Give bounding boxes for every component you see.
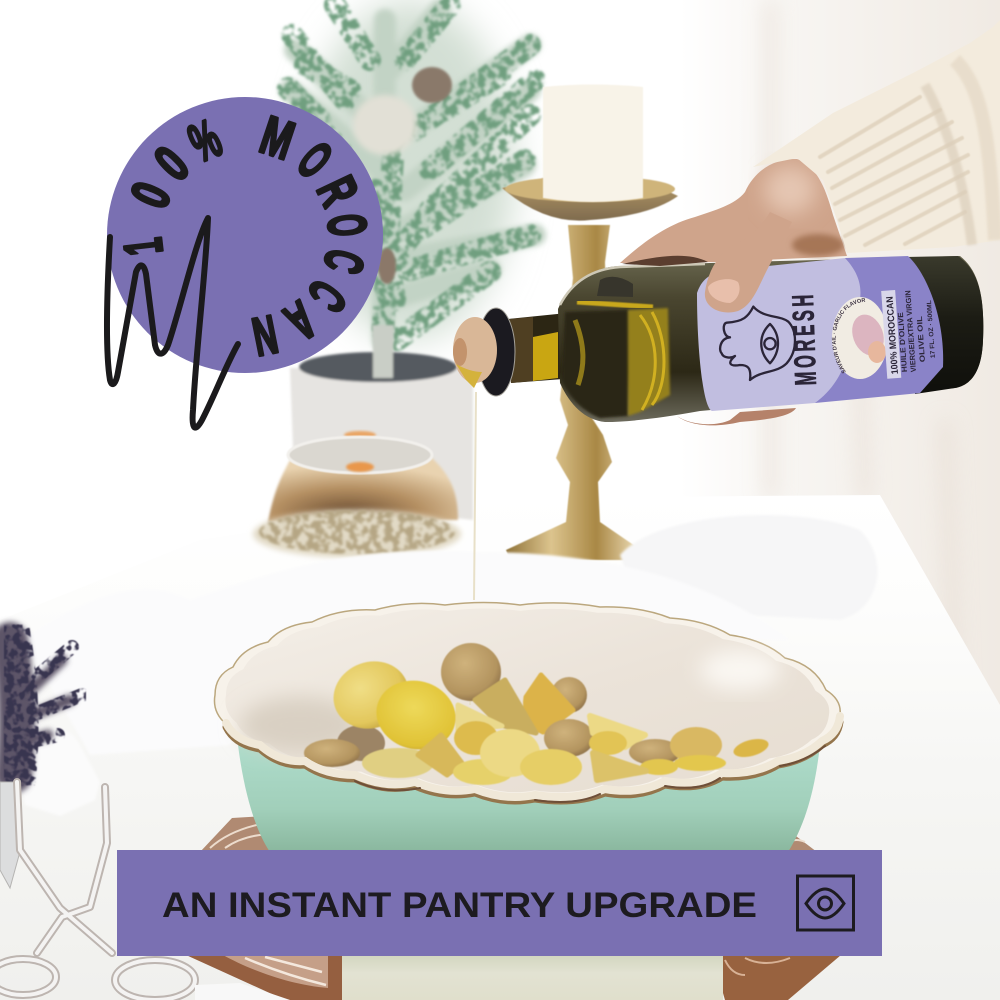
bowl: front scalloped rim: [226, 716, 840, 802]
badge: circular text: 0: [118, 174, 182, 216]
olive oil bottle: [453, 256, 984, 422]
bottle: golden oil in neck: [533, 332, 558, 381]
bowl: ivory interior with scalloped rim: [214, 602, 840, 798]
bowl: mint outer body: [238, 745, 820, 852]
photo: white pillar candle: [543, 84, 643, 202]
bottle: air bubble: [597, 277, 633, 297]
banner: [117, 850, 882, 956]
photo: lavender sprig: [8, 632, 82, 778]
label: product description: HUILE D'OLIVE: [896, 312, 909, 372]
bottle: black collar: [477, 308, 515, 396]
badge: circular text: O: [315, 212, 377, 239]
olive oil stream: [470, 392, 476, 705]
badge: circular text: 1: [114, 235, 175, 258]
icon: hamsa with eye: [720, 307, 795, 380]
brand name: MORESH: [787, 294, 823, 386]
bottle: dark oil centre: [562, 310, 628, 418]
photo: glass vase: [0, 782, 21, 888]
photo: carved wooden trivet and marble board: [186, 815, 841, 1000]
potatoes in bowl: [304, 643, 770, 785]
bottle: base dark glass: [905, 256, 983, 394]
label: product description: [896, 290, 937, 372]
badge: circular text: [114, 104, 377, 366]
icon: eye in square frame: [798, 876, 854, 930]
badge: circular text: R: [305, 168, 369, 215]
badge: purple circle: [107, 97, 383, 373]
bottle: tan pour spout: [453, 317, 497, 388]
cream knit sweater sleeve: [753, 20, 1000, 253]
label: product description: OLIVE OIL: [915, 315, 927, 362]
photo: white table: [0, 495, 1000, 1000]
bottle: neck: [508, 313, 567, 383]
badge: circular text: %: [181, 108, 230, 174]
badge: circular text: M: [253, 104, 302, 171]
photo: winter tree: [288, 0, 535, 378]
label: product description: VIERGE/EXTRA VIRGIN: [903, 290, 918, 372]
label: product description: 17 FL. OZ · 500ML: [926, 300, 937, 358]
bottle: top glass highlight: [560, 264, 705, 305]
thumb with nail: [705, 212, 792, 312]
bottle: glass body: [558, 256, 983, 422]
badge: circular text: C: [296, 269, 357, 322]
garlic medallion: [832, 297, 886, 379]
garlic medallion: SAVEUR D'AIL · GARLIC FLAVOR: [832, 298, 866, 374]
banner headline: AN INSTANT PANTRY UPGRADE: [162, 886, 757, 925]
hand: fingers beneath bottle: [677, 408, 796, 425]
badge: circular text: N: [248, 303, 282, 366]
label: light lavender panel: [697, 258, 860, 411]
photo: stone plant pot: [290, 352, 473, 520]
badge: circular text: O: [286, 131, 343, 190]
bottle: brown neck band: [510, 317, 533, 383]
hand gripping bottle: [620, 159, 847, 312]
label: white tag with origin: 100% MOROCCAN: [885, 296, 901, 375]
badge: circular text: C: [311, 243, 374, 279]
photo: silver tongs: [0, 782, 195, 1000]
badge: circular text: A: [274, 289, 326, 351]
badge: circular text: 0: [143, 135, 200, 192]
photo: brass candlestick: [502, 176, 678, 560]
photo: gold votive holder: [253, 431, 461, 558]
label: darker lavender band: [815, 256, 943, 403]
bottle: golden oil swirl: [575, 302, 670, 416]
photo: linen cloth: [20, 515, 877, 816]
badge: scribble M: [107, 218, 238, 428]
